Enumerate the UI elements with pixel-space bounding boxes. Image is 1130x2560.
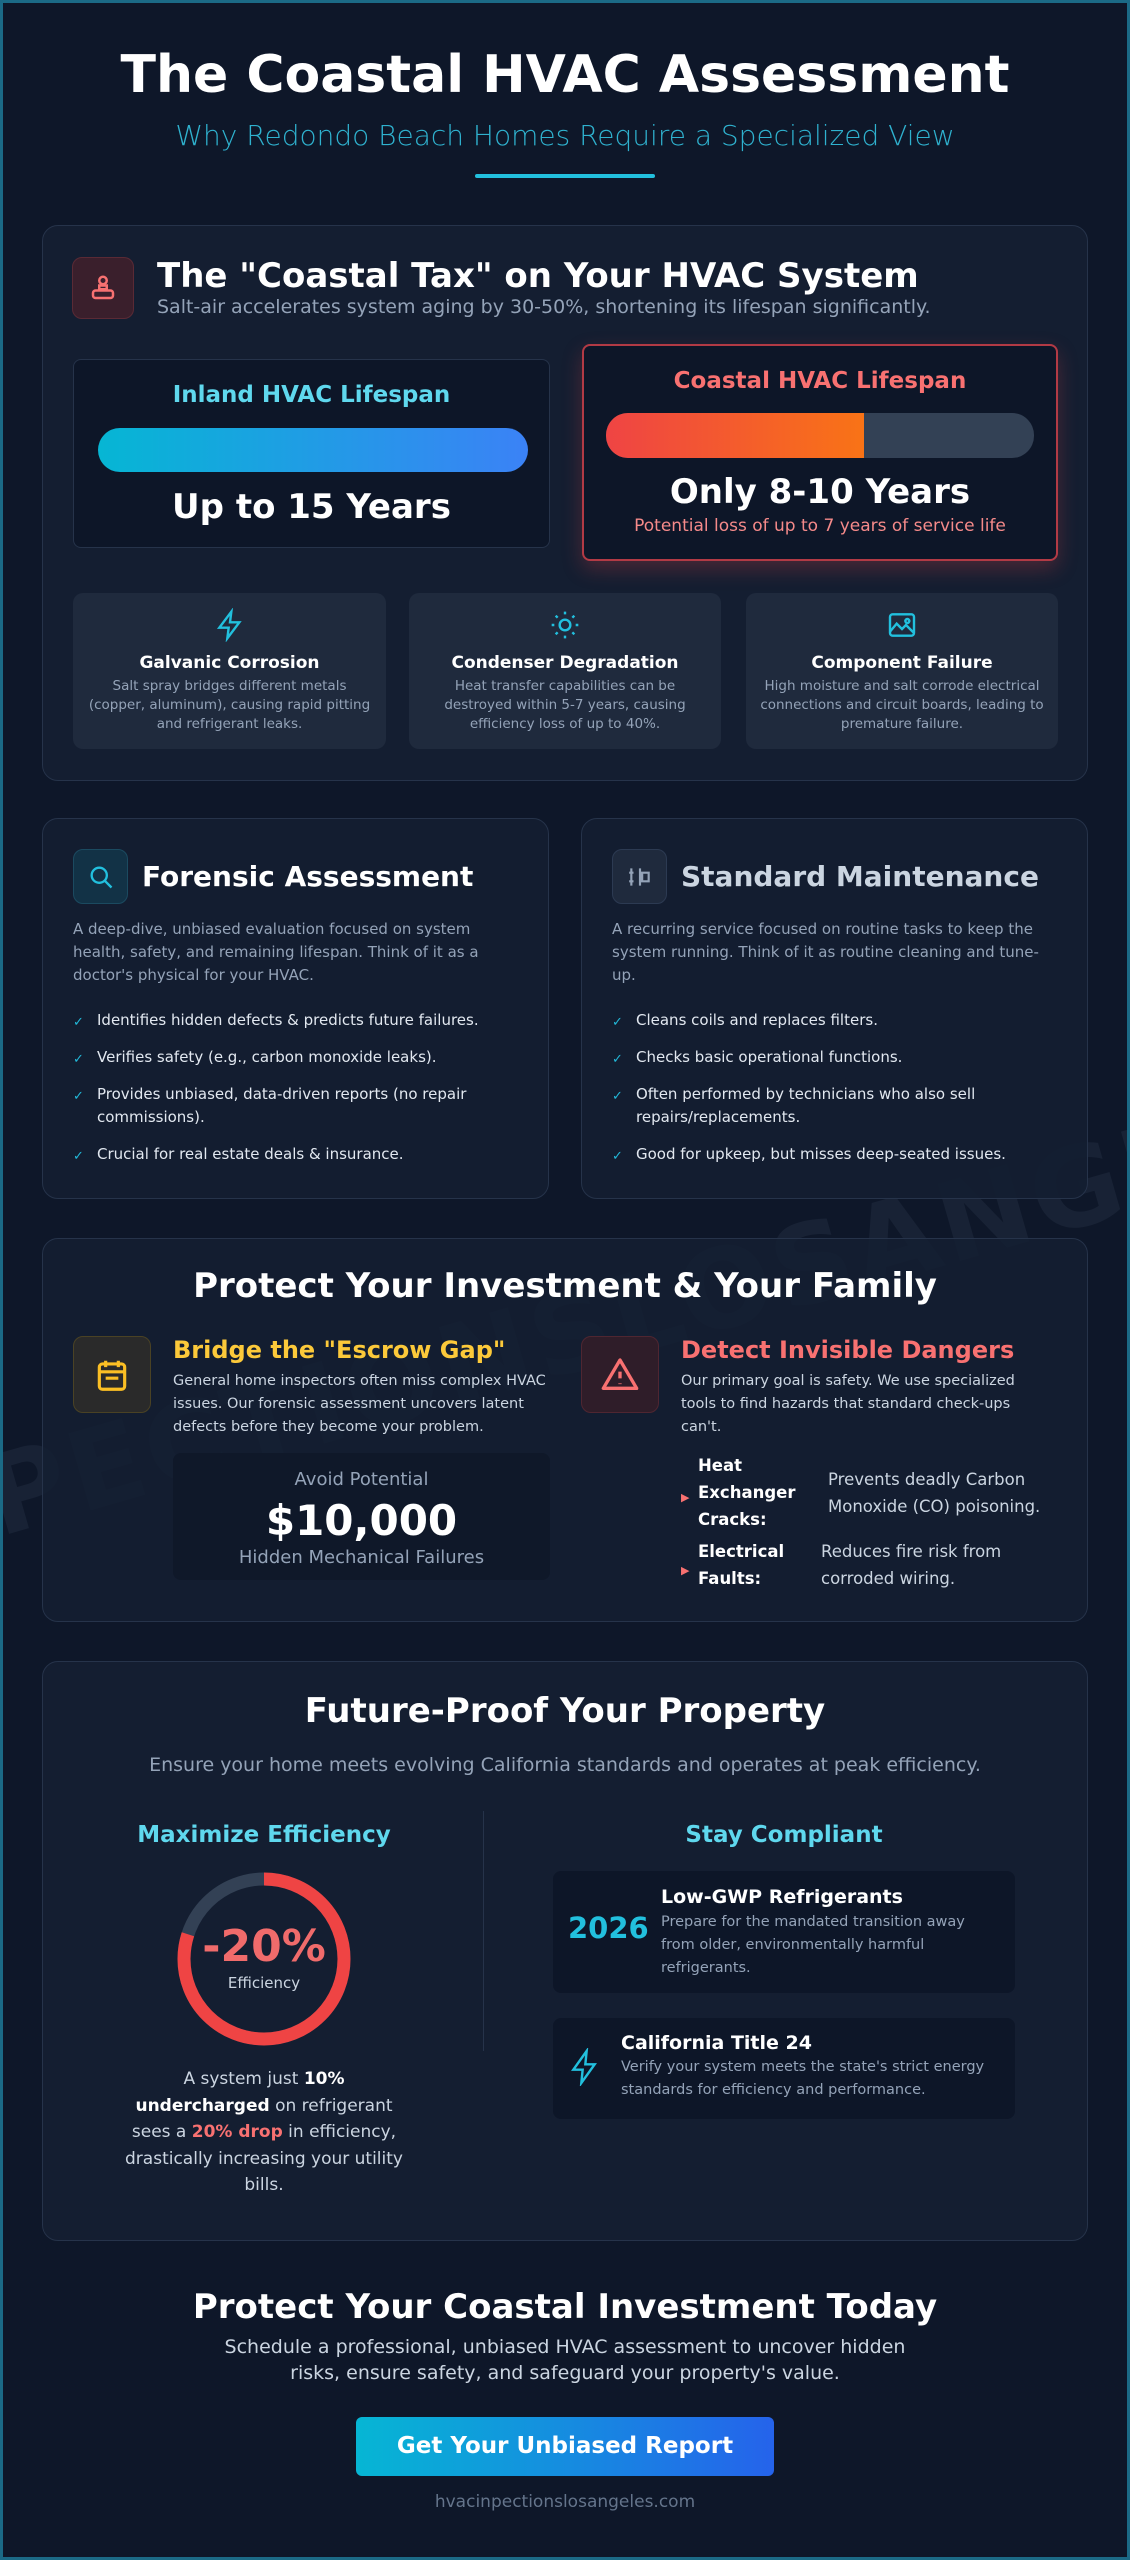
icon: image [888, 613, 916, 637]
panel: coastal tax [42, 225, 1088, 781]
list: maintenance: Good for upkeep, but misses deep-seated issues. [636, 1145, 1006, 1163]
card: 2026: 2026 [568, 1911, 649, 1945]
panel: future-proof [42, 1661, 1088, 2241]
icon: search [73, 849, 128, 904]
panel: future-proof: Ensure your home meets evolving California standards and operates at peak efficiency. [149, 1754, 981, 1776]
panel: forensic assessment: Forensic Assessment [142, 860, 473, 893]
button [356, 2417, 774, 2476]
panel: protect investment [42, 1238, 1088, 1622]
chart: donut [178, 1872, 350, 2046]
inland box: Inland HVAC Lifespan [173, 382, 450, 408]
section: efficiency: undercharged on refrigerant sees a 20% drop in efficiency, drastically increasing your utility bills. [125, 2096, 403, 2195]
card: 2026 [553, 1871, 1015, 1993]
inland box [73, 359, 550, 548]
card: 2026: Low-GWP Refrigerants [661, 1886, 903, 1908]
callout: $10,000: $10,000 [266, 1496, 457, 1545]
card: condenser: Heat transfer capabilities can be destroyed within 5-7 years, causing efficiency loss of up to 40%. [444, 678, 686, 732]
icon: sun [552, 612, 578, 638]
list: dangers: corroded wiring. [821, 1569, 955, 1588]
list: maintenance: Checks basic operational functions. [636, 1048, 902, 1066]
list: dangers: ▶ [681, 1491, 689, 1504]
list: forensic: Identifies hidden defects & predicts future failures. [97, 1011, 479, 1029]
title: The Coastal HVAC Assessment [120, 45, 1010, 105]
chart: donut: Efficiency [228, 1974, 300, 1992]
list: maintenance [614, 1011, 1006, 1163]
card: title 24 [553, 2018, 1015, 2119]
list: dangers: ▶ [681, 1564, 689, 1577]
card: galvanic: Salt spray bridges different metals (copper, aluminum), causing rapid pitting and refrigerant leaks. [89, 678, 370, 732]
card: title 24: California Title 24 [621, 2032, 812, 2054]
card: component: High moisture and salt corrode electrical connections and circuit boards, leading to premature failure. [760, 678, 1044, 732]
coastal box: Coastal HVAC Lifespan [674, 368, 966, 394]
panel: forensic assessment [42, 818, 549, 1199]
list: dangers: Exchanger [698, 1483, 795, 1502]
card: component: Component Failure [811, 653, 993, 673]
panel: forensic assessment: A deep-dive, unbiased evaluation focused on system health, safety, and remaining lifespan. Think of it as a doctor's physical for your HVAC. [73, 920, 479, 984]
footer: hvacinpectionslosangeles.com [435, 2492, 695, 2512]
chart: donut: -20% [202, 1921, 326, 1972]
icon: bolt [217, 608, 242, 642]
card: galvanic [73, 593, 386, 749]
card: component [746, 593, 1058, 749]
list: maintenance: Often performed by technicians who also sell repairs/replacements. [636, 1085, 975, 1126]
list: dangers: Prevents deadly Carbon [828, 1470, 1025, 1489]
panel: future-proof: Future-Proof Your Property [305, 1691, 825, 1731]
coastal box: Potential loss of up to 7 years of service life [634, 516, 1006, 536]
panel: protect investment: Bridge the "Escrow Gap" [173, 1336, 505, 1364]
CTA text: Schedule a professional, unbiased HVAC assessment to uncover hidden risks, ensure safety, and safeguard your property's value. [225, 2336, 905, 2384]
inland box: Up to 15 Years [172, 487, 451, 527]
list: forensic: Crucial for real estate deals & insurance. [97, 1145, 404, 1163]
section: efficiency: A system just 10% [183, 2069, 345, 2089]
panel: protect investment: General home inspectors often miss complex HVAC issues. Our forensic assessment uncovers latent defects before they become your problem. [173, 1373, 546, 1435]
panel: standard maintenance [581, 818, 1088, 1199]
icon: warning [581, 1336, 659, 1413]
icon: sliders [612, 849, 667, 904]
section: efficiency [125, 1822, 403, 2195]
coastal box: Only 8-10 Years [670, 472, 970, 512]
button: Get Your Unbiased Report [397, 2433, 733, 2459]
panel: standard maintenance: A recurring service focused on routine tasks to keep the system running. Think of it as routine cleaning and tune-up. [612, 920, 1039, 984]
heading: The "Coastal Tax" on Your HVAC System [157, 256, 919, 296]
panel: protect investment: Protect Your Investment & Your Family [193, 1266, 937, 1306]
bar: inland [98, 428, 528, 472]
section: compliance: Stay Compliant [685, 1822, 883, 1848]
card: title 24: Verify your system meets the state's strict energy standards for efficiency and performance. [621, 2059, 984, 2098]
coastal box [582, 344, 1058, 561]
icon: calendar [73, 1336, 151, 1413]
bar: coastal [606, 413, 1034, 458]
list: dangers: Faults: [698, 1569, 761, 1588]
panel: protect investment: Our primary goal is safety. We use specialized tools to find hazards that standard check-ups can't. [681, 1373, 1015, 1435]
list: dangers: Cracks: [698, 1510, 767, 1529]
CTA heading: Protect Your Coastal Investment Today [193, 2287, 937, 2327]
list: forensic [75, 1011, 479, 1163]
panel: standard maintenance: Standard Maintenance [681, 860, 1039, 893]
section: efficiency: Maximize Efficiency [137, 1822, 391, 1848]
list: dangers: Electrical [698, 1542, 784, 1561]
card: condenser: Condenser Degradation [451, 653, 679, 673]
list: forensic: Provides unbiased, data-driven reports (no repair commissions). [97, 1085, 466, 1126]
list: maintenance: Cleans coils and replaces filters. [636, 1011, 878, 1029]
callout: $10,000 [173, 1453, 550, 1580]
subtitle: Why Redondo Beach Homes Require a Specialized View [175, 119, 955, 152]
callout: $10,000: Avoid Potential [295, 1469, 428, 1490]
list: dangers [681, 1456, 1040, 1588]
list: dangers: Monoxide (CO) poisoning. [828, 1497, 1040, 1516]
subheading: Salt-air accelerates system aging by 30-50%, shortening its lifespan significantly. [157, 296, 931, 318]
card: condenser [409, 593, 721, 749]
list: forensic: Verifies safety (e.g., carbon monoxide leaks). [97, 1048, 436, 1066]
card: galvanic: Galvanic Corrosion [139, 653, 320, 673]
callout: $10,000: Hidden Mechanical Failures [239, 1547, 484, 1568]
panel: protect investment: Detect Invisible Dangers [681, 1336, 1014, 1364]
icon: coastal tax [72, 257, 134, 319]
card: 2026: Prepare for the mandated transition away from older, environmentally harmful refrigerants. [661, 1914, 965, 1976]
list: dangers: Heat [698, 1456, 742, 1475]
list: dangers: Reduces fire risk from [821, 1542, 1001, 1561]
